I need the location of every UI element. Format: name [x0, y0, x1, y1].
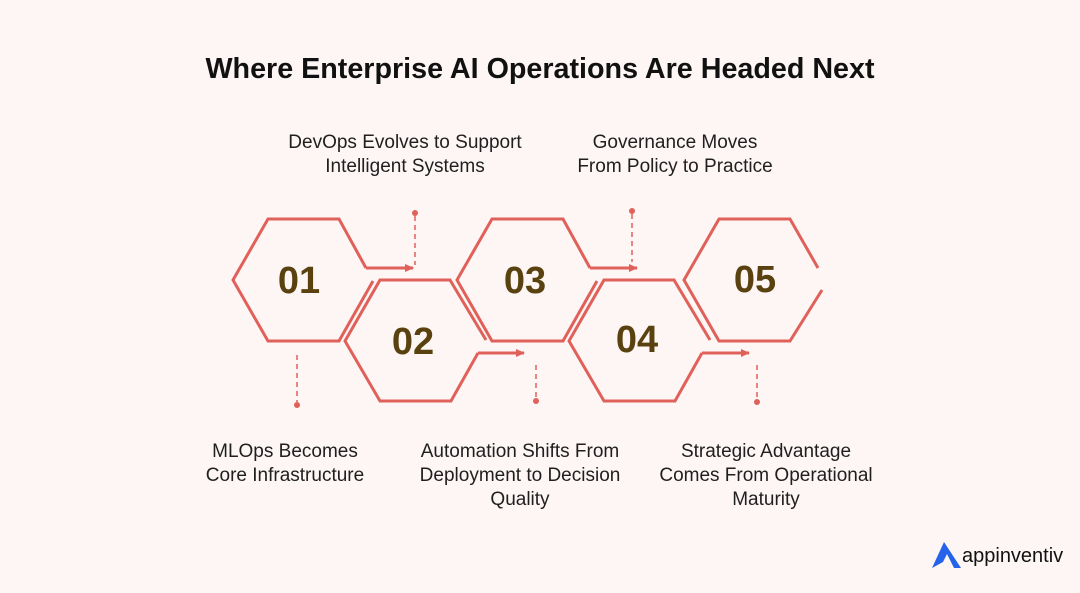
label: 02: Intelligent Systems — [325, 156, 485, 177]
hex 03 — [457, 219, 637, 341]
label: 02: DevOps Evolves to Support — [288, 132, 522, 153]
label: 03: Deployment to Decision — [420, 465, 620, 486]
logo — [932, 542, 1063, 568]
title: Where Enterprise AI Operations Are Headed Next — [205, 53, 875, 85]
numbers: 02 — [392, 321, 434, 363]
label: 05: Strategic Advantage — [681, 441, 851, 462]
label: 05: Comes From Operational — [659, 465, 873, 486]
label: 03 — [420, 441, 620, 510]
label: 02 — [288, 132, 522, 177]
hex 04 — [569, 280, 749, 401]
label: 03: Quality — [490, 489, 550, 510]
numbers: 03 — [504, 260, 546, 302]
hex 02 — [345, 280, 524, 401]
numbers: 05 — [734, 259, 776, 301]
label: 05: Maturity — [732, 489, 800, 510]
numbers — [278, 259, 776, 363]
numbers: 04 — [616, 319, 658, 361]
label: 04 — [577, 132, 773, 177]
label: 01: Core Infrastructure — [206, 465, 364, 486]
hex 05 — [684, 219, 822, 341]
label: 03: Automation Shifts From — [421, 441, 619, 462]
numbers: 01 — [278, 260, 320, 302]
hex 01 — [233, 219, 413, 341]
label: 01: MLOps Becomes — [212, 441, 358, 462]
label: 04: From Policy to Practice — [577, 156, 773, 177]
label: 01 — [206, 441, 364, 486]
logo: appinventiv — [962, 545, 1063, 567]
connectors — [294, 208, 760, 408]
label: 05 — [659, 441, 873, 510]
label: 04: Governance Moves — [593, 132, 757, 153]
